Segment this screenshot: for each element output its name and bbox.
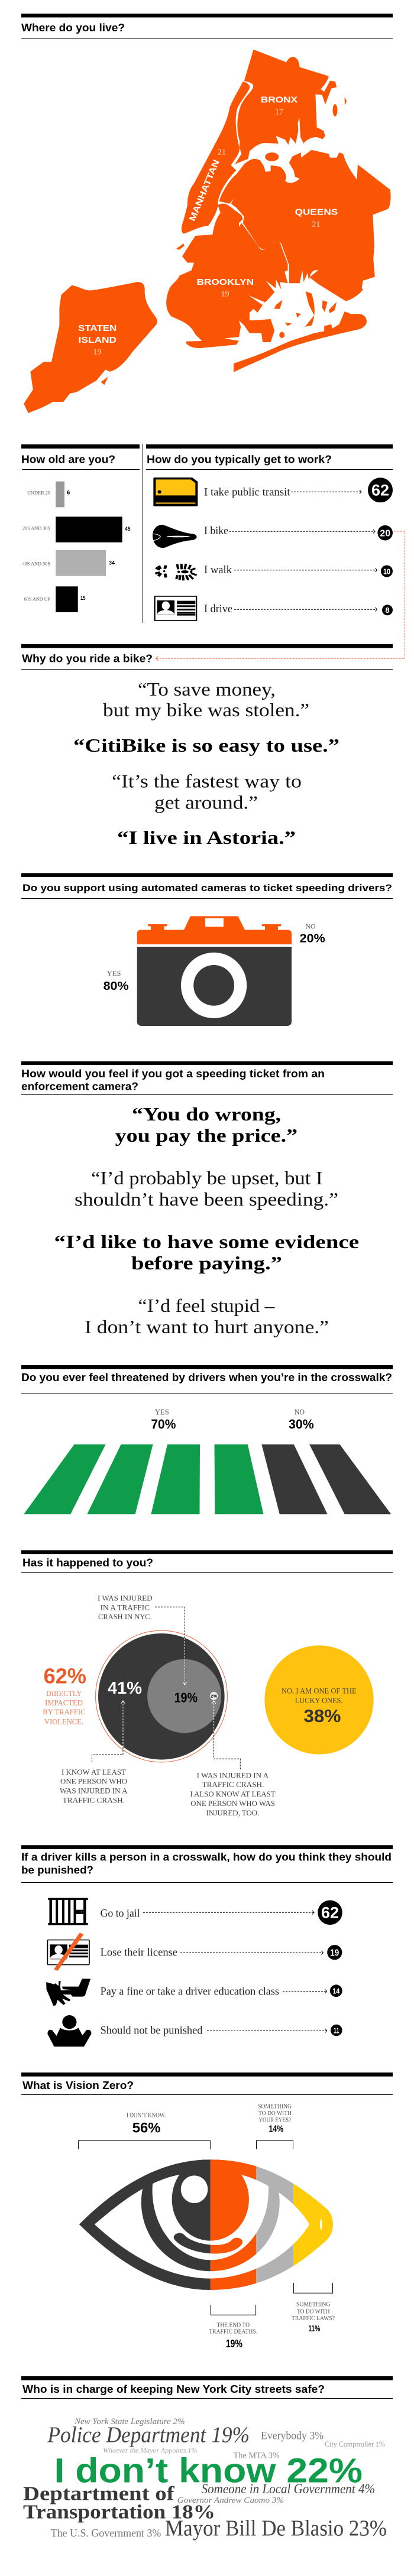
quote: you do wrong: you pay the price.” xyxy=(115,1125,297,1146)
quote: probably be upset: “I’d probably be upset, but I xyxy=(91,1167,323,1188)
word cloud: The U.S. Government 3% xyxy=(51,2528,161,2540)
callout: something to do with your eyes 14%: YOUR EYES? xyxy=(259,2117,291,2124)
label: no 30% xyxy=(289,1408,314,1431)
row: should not be punished: 11 xyxy=(334,2026,339,2035)
bar: 40s and 50s xyxy=(22,550,115,576)
callout: traffic laws 11%: SOMETHING xyxy=(296,2302,331,2308)
quote: fastest way: get around.” xyxy=(154,792,258,813)
quote: some evidence: before paying.” xyxy=(131,1252,282,1274)
heading: has it happened: Has it happened to you? xyxy=(22,1557,153,1569)
heading: speeding ticket xyxy=(21,1061,393,1095)
panel: how should drivers be punished xyxy=(21,1845,393,2046)
quote: feel stupid: I don’t want to hurt anyone.” xyxy=(85,1316,329,1337)
label: Brooklyn xyxy=(197,277,254,299)
label: Queens: 21 xyxy=(312,220,320,229)
row: drive: I drive xyxy=(204,603,232,615)
label: Queens: QUEENS xyxy=(295,207,338,217)
callout: 62% directly impacted: 62% xyxy=(44,1664,86,1688)
row: walk xyxy=(155,564,393,580)
icon: bike saddle xyxy=(153,525,197,548)
panel: crosswalk xyxy=(21,1365,393,1514)
quote: to save money: but my bike was stolen.” xyxy=(103,699,309,720)
heading: speeding ticket: How would you feel if you got a speeding ticket from an xyxy=(21,1068,325,1080)
row: lose their license xyxy=(47,1932,342,1971)
row: should not be punished xyxy=(47,2015,342,2046)
label: yes 80%: YES xyxy=(107,970,121,977)
label: yes 70%: YES xyxy=(155,1408,169,1416)
word cloud: Police Department 19% xyxy=(47,2423,250,2448)
panel: how old are you xyxy=(21,444,140,612)
callout: 62% directly impacted: BY TRAFFIC xyxy=(43,1707,86,1716)
callout: 62% directly impacted: IMPACTED xyxy=(45,1698,83,1707)
chart: crosswalk stripes xyxy=(24,1444,391,1514)
label: yes 80%: 80% xyxy=(104,980,129,993)
heading: streets safe: Who is in charge of keeping New York City streets safe? xyxy=(22,2383,325,2395)
callout: traffic laws 11%: 11% xyxy=(308,2324,320,2334)
callout: end to traffic deaths 19%: TRAFFIC DEATHS. xyxy=(209,2329,257,2335)
heading: why do you ride a bike xyxy=(21,644,393,670)
quote: probably be upset: shouldn’t have been speeding.” xyxy=(75,1188,338,1210)
callout: both injured: INJURED, TOO. xyxy=(206,1809,259,1817)
label: Bronx xyxy=(261,95,297,117)
panel: has it happened to you xyxy=(21,1550,393,1817)
icon: transit card xyxy=(153,477,198,506)
icon: camera chart xyxy=(137,916,292,1026)
bar: 40s and 50s: 34 xyxy=(109,560,115,567)
panel: speeding ticket feelings xyxy=(21,1061,393,1337)
chart: lucky ones circle: LUCKY ONES. xyxy=(295,1697,343,1705)
quote: fastest way xyxy=(112,771,302,813)
row: walk: 10 xyxy=(383,567,390,576)
chart: impacted circle: 19% xyxy=(174,1690,198,1706)
icon: footprints xyxy=(155,564,197,580)
callout: both injured: TRAFFIC CRASH. xyxy=(202,1781,264,1789)
callout: end to traffic deaths 19% xyxy=(209,2305,257,2350)
icon: driver license xyxy=(155,596,196,621)
panel: automated cameras xyxy=(21,873,393,1026)
bar: 60s and up xyxy=(24,586,86,612)
callout: know someone injured: TRAFFIC CRASH. xyxy=(63,1797,125,1805)
quote: CitiBike: “CitiBike is so easy to use.” xyxy=(73,735,339,756)
callout: both injured: ONE PERSON WHO WAS xyxy=(190,1799,275,1808)
quote: some evidence: “I’d like to have some evidence xyxy=(54,1231,359,1252)
bar: under 20 xyxy=(27,482,70,507)
row: public transit: 62 xyxy=(371,481,389,499)
word cloud: Someone in Local Government 4% xyxy=(202,2481,375,2496)
label: Brooklyn: 19 xyxy=(221,290,229,299)
callout: know someone injured: ONE PERSON WHO xyxy=(60,1778,127,1786)
quote: to save money: “To save money, xyxy=(138,678,276,700)
callout: know someone injured xyxy=(60,1701,128,1805)
heading: how old are you: How old are you? xyxy=(21,454,115,466)
word cloud: Governor Andrew Cuomo 3% xyxy=(177,2496,284,2505)
quote: probably be upset xyxy=(75,1167,338,1210)
heading: how do you typically get to work: How do you typically get to work? xyxy=(147,454,332,466)
bar chart: age groups xyxy=(22,482,131,612)
callout: 62% directly impacted xyxy=(43,1664,86,1726)
word cloud: New York State Legislature 2% xyxy=(74,2417,185,2426)
callout: traffic laws 11%: TO DO WITH xyxy=(297,2308,330,2315)
label: no 20%: 20% xyxy=(300,932,325,945)
bar: 40s and 50s: 40S AND 50S xyxy=(22,561,50,567)
quote: Astoria: “I live in Astoria.” xyxy=(117,827,296,848)
chart: impacted circle: 41% xyxy=(108,1679,142,1698)
row: lose their license: 19 xyxy=(330,1948,339,1958)
chart: eye xyxy=(79,2159,333,2290)
map of New York City boroughs xyxy=(24,50,391,413)
callout: injured in NYC xyxy=(98,1594,187,1685)
row: drive xyxy=(155,596,393,621)
label: no 30%: NO xyxy=(295,1408,305,1416)
row: pay a fine: 14 xyxy=(332,1987,340,1995)
heading: threatened in the crosswalk xyxy=(21,1365,393,1393)
heading: vision zero xyxy=(21,2073,393,2095)
bar: 20s and 30s: 20S AND 30S xyxy=(22,525,50,531)
row: pay a fine xyxy=(46,1979,342,2006)
word cloud: City Comptroller 1% xyxy=(325,2439,385,2448)
word cloud: The MTA 3% xyxy=(234,2451,280,2460)
bar: 20s and 30s xyxy=(22,517,131,543)
label: no 20% xyxy=(300,924,325,945)
row: should not be punished: Should not be punished xyxy=(101,2025,203,2037)
panel: who keeps streets safe xyxy=(21,2376,393,2541)
word cloud: Whoever the Mayor Appoints 1% xyxy=(103,2446,198,2455)
panel: why do you ride a bike xyxy=(21,644,393,848)
row: public transit xyxy=(153,477,393,506)
label: Staten Island: 19 xyxy=(93,348,101,357)
chart: lucky ones circle: NO, I AM ONE OF THE xyxy=(282,1687,357,1695)
callout: injured in NYC: IN A TRAFFIC xyxy=(101,1603,150,1612)
row: go to jail xyxy=(48,1898,342,1925)
row: lose their license: Lose their license xyxy=(101,1946,177,1958)
callout: know someone injured: I KNOW AT LEAST xyxy=(62,1768,126,1776)
chart: lucky ones circle: 38% xyxy=(303,1706,341,1726)
callout: both injured: I WAS INJURED IN A xyxy=(197,1772,269,1780)
chart: impacted circle: 2% xyxy=(211,1694,217,1698)
quote: feel stupid: “I’d feel stupid – xyxy=(138,1295,276,1316)
bar: 60s and up: 60S AND UP xyxy=(24,596,50,602)
heading: how old are you xyxy=(21,444,140,470)
callout: know someone injured: WAS INJURED IN A xyxy=(60,1787,128,1795)
callout: I don't know 56%: I DON’T KNOW. xyxy=(127,2112,166,2119)
callout: both injured: I ALSO KNOW AT LEAST xyxy=(190,1790,276,1798)
callout: end to traffic deaths 19%: THE END TO xyxy=(216,2322,250,2329)
word cloud: Mayor Bill De Blasio 23% xyxy=(165,2516,387,2541)
heading: punished: If a driver kills a person in a crosswalk, how do you think they should xyxy=(21,1851,392,1863)
callout: I don't know 56% xyxy=(79,2112,210,2149)
label: no 20%: NO xyxy=(305,924,316,931)
callout: something to do with your eyes 14%: TO DO WITH xyxy=(258,2110,292,2117)
label: Bronx: 17 xyxy=(275,108,283,117)
bar: 60s and up: 15 xyxy=(80,595,86,602)
heading: where do you live: Where do you live? xyxy=(21,22,125,34)
icon: crossed-out license xyxy=(47,1932,89,1971)
chart: lucky ones circle xyxy=(264,1645,374,1755)
word cloud: Deptartment of xyxy=(23,2483,174,2505)
label: Staten Island: STATEN xyxy=(78,323,117,333)
label: Manhattan: 21 xyxy=(218,148,226,157)
quote: feel stupid xyxy=(85,1295,329,1337)
word cloud: Everybody 3% xyxy=(261,2429,324,2442)
quote: to save money xyxy=(103,678,309,720)
label: Brooklyn: BROOKLYN xyxy=(197,277,254,287)
row: bike xyxy=(153,525,393,548)
heading: automated cameras xyxy=(21,873,393,899)
label: Staten Island: ISLAND xyxy=(78,335,117,345)
callout: traffic laws 11%: TRAFFIC LAWS? xyxy=(292,2315,335,2322)
arrow: bike to why do you ride a bike xyxy=(156,531,405,661)
heading: vision zero: What is Vision Zero? xyxy=(22,2080,134,2091)
callout: injured in NYC: I WAS INJURED xyxy=(98,1594,153,1603)
word cloud xyxy=(23,2417,387,2541)
label: Staten Island xyxy=(78,323,117,357)
row: go to jail: Go to jail xyxy=(101,1907,140,1919)
heading: how do you typically get to work xyxy=(146,444,393,470)
heading: has it happened xyxy=(21,1550,393,1573)
panel: how do you get to work xyxy=(146,444,393,621)
row: walk: I walk xyxy=(204,564,232,576)
panel: what is vision zero xyxy=(21,2073,393,2350)
icon: person with raised arms xyxy=(47,2015,91,2046)
label: Queens xyxy=(295,207,338,229)
label: Manhattan xyxy=(187,148,226,223)
label: no 30%: 30% xyxy=(289,1417,314,1431)
icon: hands exchanging money xyxy=(46,1979,90,2006)
callout: both injured xyxy=(190,1701,276,1817)
heading: where do you live xyxy=(21,14,393,39)
panel: where do you live xyxy=(21,14,393,413)
label: Manhattan: MANHATTAN xyxy=(187,158,222,223)
callout: end to traffic deaths 19%: 19% xyxy=(226,2338,242,2350)
heading: punished xyxy=(21,1845,393,1883)
callout: I don't know 56%: 56% xyxy=(132,2120,160,2136)
heading: speeding ticket: enforcement camera? xyxy=(21,1081,138,1093)
row: drive: 8 xyxy=(385,606,390,615)
row: public transit: I take public transit xyxy=(204,486,290,498)
row: pay a fine: Pay a fine or take a driver education class xyxy=(101,1986,279,1998)
quote: you do wrong: “You do wrong, xyxy=(132,1103,281,1125)
row: bike: 20 xyxy=(380,528,390,539)
quote: you do wrong xyxy=(115,1103,297,1146)
row: bike: I bike xyxy=(204,525,228,537)
callout: something to do with your eyes 14%: SOMETHING xyxy=(258,2103,292,2110)
callout: injured in NYC: CRASH IN NYC. xyxy=(98,1613,152,1621)
label: Bronx: BRONX xyxy=(261,95,297,105)
callout: something to do with your eyes 14%: 14% xyxy=(269,2125,283,2135)
callout: 62% directly impacted: VIOLENCE. xyxy=(44,1717,83,1726)
label: yes 80% xyxy=(104,970,129,993)
callout: 62% directly impacted: DIRECTLY xyxy=(46,1689,82,1698)
heading: streets safe xyxy=(21,2376,393,2399)
word cloud: I don’t know 22% xyxy=(54,2452,363,2490)
callout: something to do with your eyes 14% xyxy=(257,2103,293,2149)
heading: automated cameras: Do you support using automated cameras to ticket speeding drivers? xyxy=(22,882,392,894)
quote: some evidence xyxy=(54,1231,359,1274)
chart: impacted circle xyxy=(96,1630,227,1762)
word cloud: Transportation 18% xyxy=(23,2502,215,2523)
heading: why do you ride a bike: Why do you ride a bike? xyxy=(22,653,153,665)
bar: under 20: 6 xyxy=(67,490,70,496)
label: yes 70% xyxy=(151,1408,176,1431)
bar: under 20: UNDER 20 xyxy=(27,490,50,496)
quote: fastest way: “It’s the fastest way to xyxy=(112,771,302,792)
bar: 20s and 30s: 45 xyxy=(125,526,131,532)
callout: traffic laws 11% xyxy=(292,2283,335,2334)
heading: punished: be punished? xyxy=(21,1864,93,1876)
row: go to jail: 62 xyxy=(321,1904,339,1922)
heading: threatened in the crosswalk: Do you ever feel threatened by drivers when you’re in the crosswalk? xyxy=(21,1372,392,1383)
icon: jail bars xyxy=(48,1898,88,1925)
label: yes 70%: 70% xyxy=(151,1417,176,1431)
